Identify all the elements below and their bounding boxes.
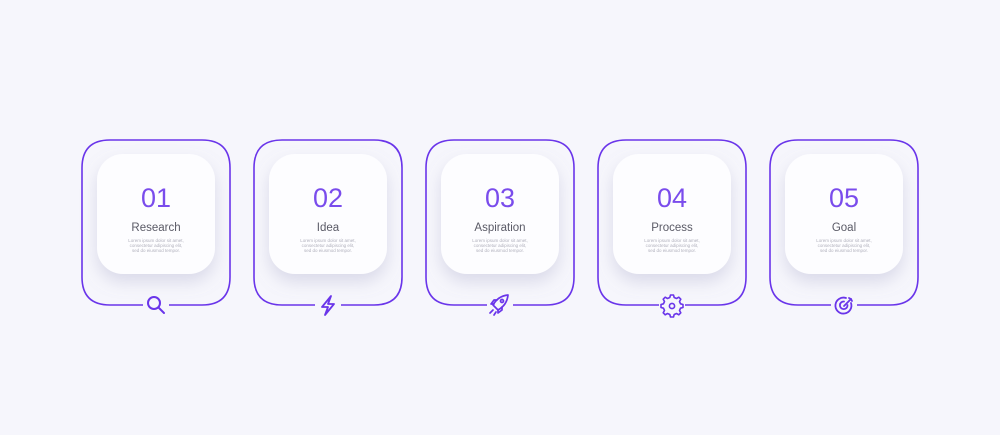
- heading: Research: [131, 222, 181, 234]
- icon: rocket: [490, 295, 508, 315]
- text block: sed do eiusmod tempor.: [304, 248, 352, 253]
- panel: 02 Idea: [254, 140, 402, 315]
- panel: 05 Goal: [770, 140, 918, 314]
- panel: 04 Process: [598, 140, 746, 317]
- text block: Lorem ipsum dolor sit amet,: [300, 238, 356, 243]
- text block: Lorem ipsum dolor sit amet,: [472, 238, 528, 243]
- text block: sed do eiusmod tempor.: [476, 248, 524, 253]
- number: 03: [485, 183, 515, 213]
- panel: 01 Research: [82, 140, 230, 313]
- text block: [644, 238, 700, 253]
- text block: [816, 238, 872, 253]
- text block: consectetur adipiscing elit,: [818, 243, 870, 248]
- panel: 03 Aspiration: [426, 140, 574, 315]
- icon: target: [835, 298, 852, 314]
- text block: Lorem ipsum dolor sit amet,: [816, 238, 872, 243]
- number: 02: [313, 183, 343, 213]
- text block: sed do eiusmod tempor.: [820, 248, 868, 253]
- heading: Process: [651, 222, 693, 234]
- heading: Idea: [317, 222, 340, 234]
- heading: Goal: [832, 222, 856, 234]
- text block: [472, 238, 528, 253]
- text block: consectetur adipiscing elit,: [474, 243, 526, 248]
- text block: [300, 238, 356, 253]
- text block: [128, 238, 184, 253]
- text block: consectetur adipiscing elit,: [302, 243, 354, 248]
- number: 04: [657, 183, 687, 213]
- text block: consectetur adipiscing elit,: [646, 243, 698, 248]
- icon: gear: [661, 295, 683, 317]
- number: 05: [829, 183, 859, 213]
- text block: sed do eiusmod tempor.: [648, 248, 696, 253]
- icon: lightning: [322, 296, 334, 315]
- text block: sed do eiusmod tempor.: [132, 248, 180, 253]
- text block: consectetur adipiscing elit,: [130, 243, 182, 248]
- heading: Aspiration: [474, 222, 526, 234]
- icon: magnifier: [148, 297, 164, 313]
- text block: Lorem ipsum dolor sit amet,: [644, 238, 700, 243]
- text block: Lorem ipsum dolor sit amet,: [128, 238, 184, 243]
- number: 01: [141, 183, 171, 213]
